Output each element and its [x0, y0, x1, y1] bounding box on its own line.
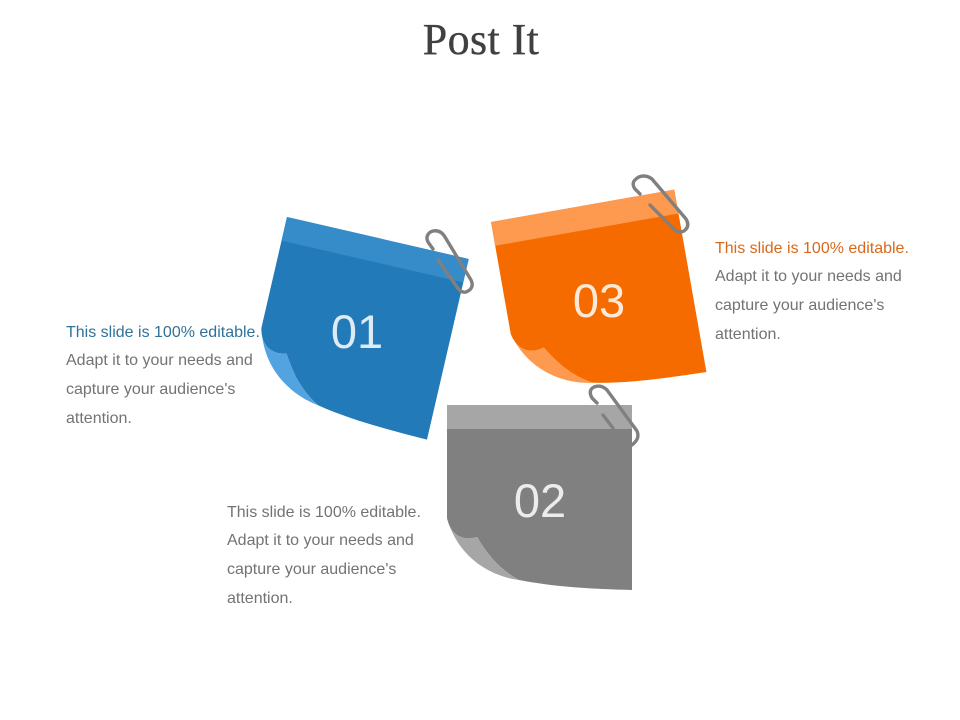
- note 01 sheet: [245, 217, 469, 440]
- icon: paperclip 01: [427, 231, 472, 292]
- note 03 curled corner: [511, 321, 593, 395]
- note 03 top band: [491, 190, 678, 246]
- note 03 body: [491, 190, 706, 404]
- note 01 curled corner: [247, 328, 332, 405]
- text block: note 01 description: [66, 324, 260, 427]
- text block: note 01 description: Adapt it to your needs and: [66, 352, 253, 369]
- text block: note 02 description: Adapt it to your needs and: [227, 532, 414, 549]
- note 02 body: [447, 405, 632, 590]
- number 03: 03: [573, 274, 625, 327]
- text block: note 01 description: This slide is 100% editable.: [66, 324, 260, 341]
- text block: note 01 description: capture your audience's: [66, 381, 235, 398]
- text block: note 03 description: [715, 240, 909, 343]
- note 02 sheet: [447, 405, 632, 590]
- text block: note 03 description: This slide is 100% editable.: [715, 240, 909, 257]
- text block: note 02 description: [227, 504, 421, 607]
- note 02 curled corner: [447, 518, 519, 580]
- note 01 body: [245, 217, 469, 440]
- note 02 top band: [447, 405, 632, 429]
- text block: note 03 description: attention.: [715, 326, 781, 343]
- panel: note 02: [447, 386, 638, 590]
- icon: paperclip 03: [633, 176, 688, 232]
- text block: note 03 description: capture your audience's: [715, 297, 884, 314]
- note 01 top band: [282, 217, 469, 283]
- panel: note 03: [491, 176, 706, 404]
- text block: note 01 description: attention.: [66, 410, 132, 427]
- text block: note 03 description: Adapt it to your needs and: [715, 268, 902, 285]
- text block: note 02 description: This slide is 100% editable.: [227, 504, 421, 521]
- number 02: 02: [514, 474, 566, 527]
- note 03 sheet: [491, 190, 706, 404]
- text block: note 02 description: capture your audience's: [227, 561, 396, 578]
- title: Post It: [423, 15, 539, 64]
- number 01: 01: [331, 305, 383, 358]
- panel: note 01: [245, 217, 472, 440]
- icon: paperclip 02: [590, 386, 638, 445]
- text block: note 02 description: attention.: [227, 590, 293, 607]
